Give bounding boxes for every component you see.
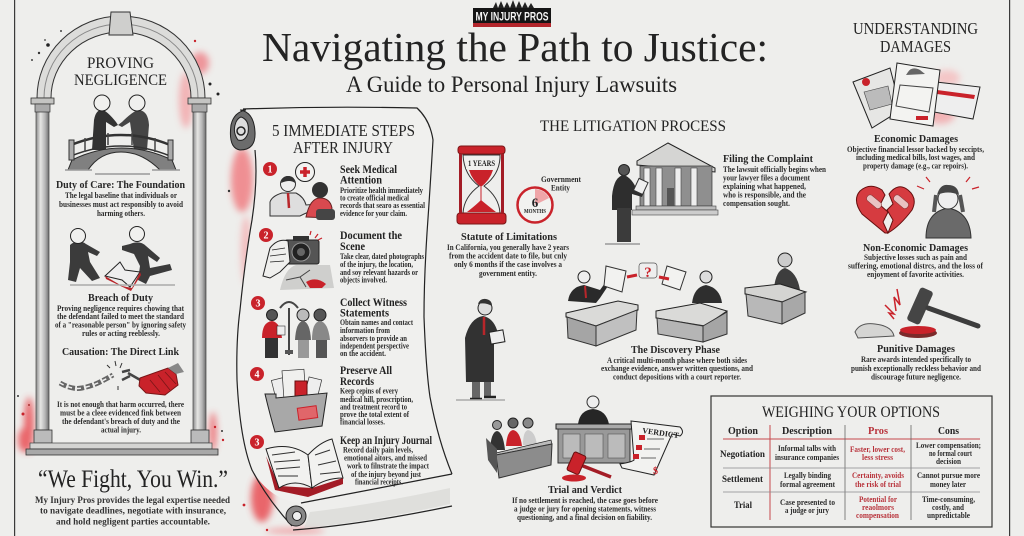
text: preserve all records: medical hill, proscription, <box>340 395 413 404</box>
number 3 <box>251 296 265 310</box>
text: statute of limitations <box>447 231 569 278</box>
text: preserve all records: and treatment record to <box>340 402 407 412</box>
text: duty of care: The legal baseline that individuals or <box>65 191 177 200</box>
table row: settlement <box>722 471 980 489</box>
text: seek medical attention <box>340 164 426 218</box>
table row: trial: Trial <box>734 501 752 511</box>
panel: weighing your options table <box>711 396 992 527</box>
text: breach of duty: Breach of Duty <box>88 292 153 304</box>
table row: negotiation: Lower compensation; <box>916 441 981 450</box>
number 1: 1 <box>268 164 272 176</box>
icon: doctor and patient <box>270 162 335 220</box>
table grid <box>723 425 980 520</box>
number 3: 3 <box>256 298 260 310</box>
text: keep an injury journal: of the injury beyond just <box>351 470 421 479</box>
text: collect witness statements <box>340 297 413 358</box>
text: preserve all records: Keep cepins of every <box>340 386 398 396</box>
text: trial and verdict: If no settlement is reached, the case goes before <box>512 496 658 505</box>
icon: open journal <box>266 439 343 497</box>
heading: 5 immediate steps: 5 IMMEDIATE STEPS <box>272 121 415 140</box>
step 1: seek medical attention <box>263 162 426 220</box>
number 2: 2 <box>264 230 268 242</box>
text: filing the complaint <box>723 153 827 208</box>
text: seek medical attention: evidence for your claim. <box>340 209 407 218</box>
icon: six month clock: 6 <box>532 195 539 210</box>
text: statute of limitations: government entity. <box>479 269 537 278</box>
number 1 <box>263 162 277 176</box>
icon: breach of duty figures and book <box>68 226 175 291</box>
icon: handshake on bridge <box>65 95 180 174</box>
text: breach of duty: Proving negligence requires chowing that <box>57 304 184 313</box>
table header: Pros <box>868 426 888 437</box>
number 4: 4 <box>254 370 260 380</box>
text: document the scene <box>340 230 424 284</box>
icon: broken chain and red arm <box>60 361 184 395</box>
table row: trial: a judge or jury <box>785 506 829 515</box>
table row: negotiation: Faster, lower cost, <box>850 445 905 454</box>
heading: proving negligence: PROVING <box>87 55 154 72</box>
text: duty of care: Duty of Care: The Foundation <box>56 179 185 191</box>
icon: courtroom with jury, judge, gavel and verdict <box>486 396 682 482</box>
table row: negotiation: decision <box>936 457 962 466</box>
label: government entity: Entity <box>551 184 570 192</box>
text: economic damages <box>847 133 984 170</box>
text: causation body: actual injury. <box>101 426 141 434</box>
table row: negotiation: less stress <box>862 453 893 462</box>
number 5 <box>250 435 264 449</box>
text: collect witness statements: on the accident. <box>340 349 386 358</box>
text: keep an injury journal: emotional aitors, and missed <box>344 454 428 462</box>
text: duty of care <box>56 179 185 218</box>
table header <box>728 426 959 437</box>
text: document the scene: Document the <box>340 230 402 242</box>
text: collect witness statements: independent perspective <box>340 342 409 350</box>
text: non-economic damages <box>848 242 983 279</box>
text: non-economic damages: Non-Economic Damages <box>863 242 969 254</box>
text: seek medical attention: Seek Medical <box>340 164 397 176</box>
table row: settlement: formal agreement <box>780 480 835 489</box>
panel: the litigation process <box>447 118 827 522</box>
table row: settlement: money later <box>930 480 966 489</box>
table row: trial: Potential for <box>859 495 897 504</box>
table row: settlement: Certainty, avoids <box>852 471 904 480</box>
text: keep an injury journal: Keep an Injury Journal <box>340 435 432 447</box>
text: non-economic damages: Subjective losses such as pain and <box>864 253 968 262</box>
table row: settlement: Legally binding <box>784 471 831 480</box>
icon: six month clock <box>518 188 552 222</box>
text: trial and verdict <box>512 484 658 522</box>
table row: trial: unpredictable <box>927 511 970 520</box>
text: the discovery phase: exchange evidence, answer written questions, and <box>601 364 754 373</box>
text: causation body <box>57 400 184 434</box>
heading: 5 immediate steps: AFTER INJURY <box>293 138 393 157</box>
table row: trial <box>734 495 975 520</box>
text: preserve all records: prove the total extent of <box>340 410 409 419</box>
heading: proving negligence <box>74 55 167 89</box>
text: statute of limitations: from the accident date to file, but cnly <box>449 252 567 260</box>
table row: trial: Case presented to <box>780 498 835 507</box>
text: seek medical attention: records that searo as essential <box>340 201 426 210</box>
callout: we fight, you win: and hold negligent parties accountable. <box>56 516 210 528</box>
icon: courthouse and lawyer <box>605 143 718 244</box>
text: collect witness statements: information from <box>340 326 390 335</box>
icon: standing lawyer <box>456 299 505 400</box>
text: keep an injury journal <box>340 435 432 486</box>
text: punitive damages: punish exceptionally reckless behavior and <box>851 364 982 373</box>
text: the discovery phase: The Discovery Phase <box>631 344 720 356</box>
step 4: preserve all records <box>250 365 413 432</box>
text: document the scene: of the injury, the location, <box>340 260 413 269</box>
text: filing the complaint: who is responsible, and the <box>723 190 806 200</box>
heading: understanding damages: UNDERSTANDING <box>853 19 978 38</box>
icon: broken heart and distressed person <box>856 177 979 238</box>
logo: MY INJURY PROS <box>476 10 548 24</box>
text: punitive damages: discourage future negligence. <box>871 372 961 382</box>
icon: hourglass <box>457 146 506 224</box>
panel: 5 immediate steps scroll <box>230 107 452 530</box>
text: breach of duty <box>55 292 186 338</box>
text: document the scene: objects involved. <box>340 276 387 284</box>
text: trial and verdict: Trial and Verdict <box>548 484 622 496</box>
heading: 5 immediate steps <box>272 121 415 157</box>
logo <box>473 0 551 27</box>
text: breach of duty: the defendant failed to meet the standard <box>57 312 185 321</box>
scroll shape <box>230 107 452 530</box>
panel: understanding damages <box>847 19 984 382</box>
heading: understanding damages <box>853 19 978 56</box>
text: document the scene: Take clear, dated photographs <box>340 252 424 261</box>
text: seek medical attention: Prioritize health immediately <box>340 186 423 195</box>
text: collect witness statements: Obtain names and contact <box>340 318 413 327</box>
table header: Option <box>728 426 758 437</box>
text: causation body: must be a cleee evidenced fink between <box>60 409 182 418</box>
text: economic damages: property damage (e.g., car repoirs). <box>863 162 968 170</box>
icon: courtroom with jury, judge, gavel and verdict: $ <box>653 466 658 477</box>
text: duty of care: harming others. <box>97 209 145 218</box>
text: causation heading: Causation: The Direct Link <box>62 346 180 358</box>
icon: bills and receipts <box>853 63 980 128</box>
text: non-economic damages: suffering, emotional distrcs, and the loss of <box>848 262 983 270</box>
heading: the litigation process: THE LITIGATION PROCESS <box>540 118 726 135</box>
table row: trial: costly, and <box>932 503 965 512</box>
table row: negotiation: Negotiation <box>720 450 766 460</box>
text: keep an injury journal: financial receipts. <box>355 478 403 486</box>
title: A Guide to Personal Injury Lawsuits <box>346 72 677 97</box>
text: causation body: the defendant's breach of duty and the <box>62 417 180 426</box>
text: filing the complaint: The lawsuit officially begins when <box>723 165 827 174</box>
text: keep an injury journal: Record daily pain levels, <box>343 446 413 454</box>
text: punitive damages <box>851 343 982 382</box>
table header: Cons <box>938 426 959 437</box>
text: keep an injury journal: work to filnstrate the impact <box>347 462 429 470</box>
table row: trial: compensation <box>856 511 900 520</box>
number 2 <box>259 228 273 242</box>
icon: discovery phase desks and documents <box>566 253 806 346</box>
text: statute of limitations: Statute of Limitations <box>461 231 558 243</box>
text: economic damages: Objective financial lessor backed by seccipts, <box>847 145 984 154</box>
icon: discovery phase desks and documents: ? <box>644 265 652 281</box>
text: punitive damages: Punitive Damages <box>877 343 956 355</box>
ink dots <box>17 30 268 531</box>
icon: punitive gavel <box>855 287 978 338</box>
icon: six month clock: MONTHS <box>524 209 547 215</box>
text: duty of care: businesses must act responsibly to avoid <box>59 200 184 209</box>
text: punitive damages: Rare awards intended specifically to <box>861 355 971 364</box>
number 5: 3 <box>254 438 260 448</box>
callout: we fight, you win: My Injury Pros provides the legal expertise needed <box>35 495 231 506</box>
icon: folder of records <box>265 369 327 432</box>
icon: witnesses and street lamp <box>262 302 330 358</box>
table row: settlement: the risk of trial <box>855 480 902 489</box>
title: Navigating the Path to Justice: <box>262 24 768 70</box>
icon: courtroom with jury, judge, gavel and verdict: VERDICT <box>642 426 680 440</box>
label: government entity: Government <box>541 175 581 184</box>
heading: weighing your options: WEIGHING YOUR OPTIONS <box>762 404 940 421</box>
text: statute of limitations: In California, you generally have 2 years <box>447 243 569 252</box>
table row: negotiation <box>720 441 981 466</box>
callout: we fight, you win: “We Fight, You Win.” <box>38 466 228 493</box>
text: the discovery phase: conduct depositions with a court reporter. <box>613 372 741 382</box>
text: breach of duty: of a "reasonable person" by ignoring safety <box>55 320 186 330</box>
text: filing the complaint: compensation sought. <box>723 199 790 208</box>
heading: proving negligence: NEGLIGENCE <box>74 72 167 89</box>
title <box>262 24 768 97</box>
text: collect witness statements: Collect Witness <box>340 297 407 309</box>
step 2: document the scene <box>259 228 424 290</box>
text: preserve all records <box>340 365 413 426</box>
text: document the scene: Scene <box>340 241 365 253</box>
panel: proving negligence arch <box>26 12 218 455</box>
callout: we fight, you win <box>35 466 231 528</box>
text: breach of duty: rules or acting reeblessly. <box>82 329 160 338</box>
step 3: collect witness statements <box>251 296 413 358</box>
heading: understanding damages: DAMAGES <box>880 37 951 56</box>
text: economic damages: Economic Damages <box>874 133 959 145</box>
table row: trial: Time-consuming, <box>922 495 975 504</box>
icon: camera and accident photo <box>263 231 334 290</box>
table row: settlement: Cannot pursue more <box>917 471 980 480</box>
step 5: keep an injury journal <box>250 435 432 497</box>
text: the discovery phase <box>601 344 754 382</box>
table row: settlement: Settlement <box>722 475 764 485</box>
text: preserve all records: Preserve All <box>340 365 392 377</box>
text: statute of limitations: only 6 months if the case involves a <box>454 260 562 269</box>
arch frame <box>26 12 218 455</box>
text: non-economic damages: enjoyment of favorite activities. <box>867 270 964 279</box>
table row: negotiation: no formal court <box>929 449 972 458</box>
table header: Description <box>782 426 832 437</box>
number 4 <box>250 367 264 381</box>
callout: we fight, you win: to navigate deadlines, negotiate with insurance, <box>40 506 227 516</box>
table row: negotiation: insurance companies <box>775 453 839 462</box>
text: filing the complaint: your lawyer files a document <box>723 174 810 182</box>
text: seek medical attention: to create official medical <box>340 194 410 202</box>
text: preserve all records: Records <box>340 376 374 388</box>
text: document the scene: and soy relevant hazards or <box>340 268 418 277</box>
text: causation body: It is not enough that harm occurred, there <box>57 400 184 409</box>
text: filing the complaint: Filing the Complaint <box>723 153 813 165</box>
table row: negotiation: Informal talbs with <box>778 444 837 453</box>
text: preserve all records: financial losses. <box>340 418 385 426</box>
text: trial and verdict: questioning, and a final decision on fiability. <box>517 513 652 522</box>
text: trial and verdict: a judge or jury for opening statements, witness <box>514 504 656 514</box>
icon: hourglass: 1 YEARS <box>468 159 495 168</box>
text: seek medical attention: Attention <box>340 174 383 186</box>
text: the discovery phase: A critical multi-month phase where both sides <box>607 356 747 365</box>
text: filing the complaint: explaining what happened, <box>723 182 806 191</box>
text: collect witness statements: absorvers to provide an <box>340 334 408 343</box>
table row: trial: reaolmors <box>862 503 894 512</box>
label: government entity <box>541 175 581 192</box>
text: collect witness statements: Statements <box>340 308 389 320</box>
text: economic damages: including medical bills, lost wages, and <box>856 153 976 162</box>
